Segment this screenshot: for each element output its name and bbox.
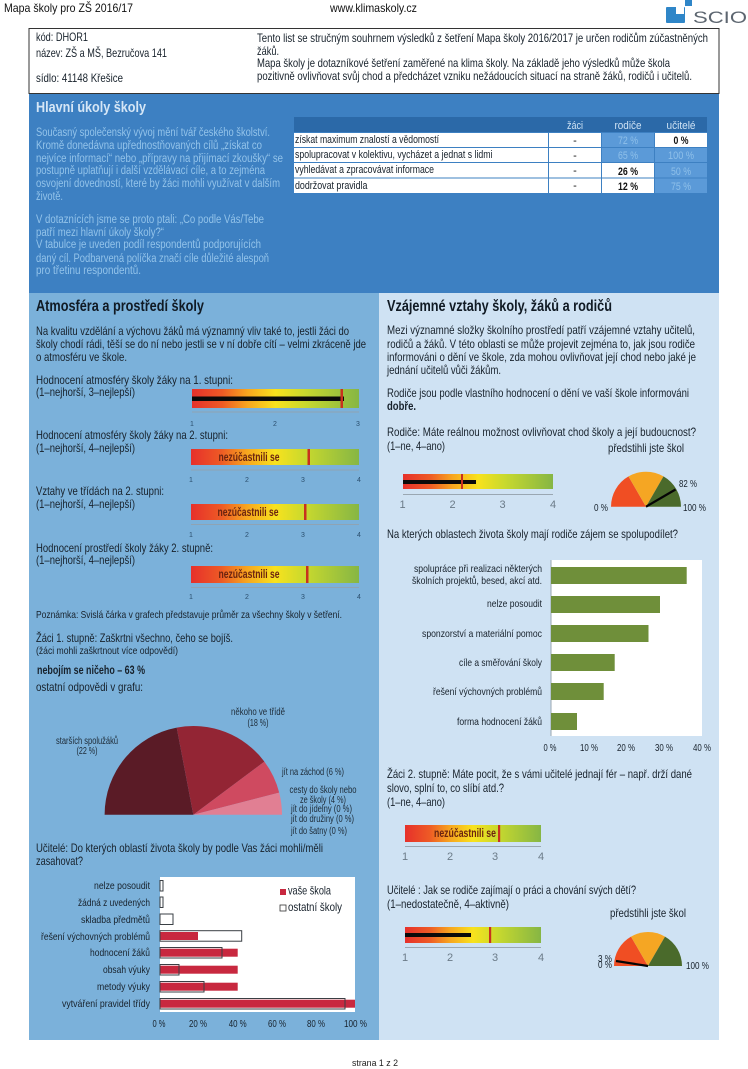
table rows: - [573,150,577,162]
page footer: strana 1 z 2 [352,1058,398,1069]
page header: www.klimaskoly.cz [329,1,417,15]
scale chart: class relations: 2 [245,532,249,539]
intro text: žáků. [257,44,279,58]
legend: vaše škola [288,884,331,898]
icon: SCIO logo: SCIO [693,8,747,27]
category labels: spolupráce při realizaci některých [414,563,542,575]
panel: relationships of school, pupils and parents [379,293,719,1040]
category labels: školních projektů, besed, akcí atd. [412,575,542,587]
green bars [551,567,687,730]
scale chart: atmosphere, 2nd grade pupils: Hodnocení atmosféry školy žáky na 2. stupni: [36,428,228,442]
scale chart: atmosphere, 2nd grade pupils: (1–nejhorší, 4–nejlepší) [36,441,135,455]
scale chart: school environment: (1–nejhorší, 4–nejlepší) [36,553,135,567]
scale chart: school environment: 3 [301,594,305,601]
scale chart: class relations: 4 [357,532,361,539]
table rows: dodržovat pravidla [295,180,368,192]
table rows: 50 % [671,166,691,178]
scale chart: teachers on parents interest: Učitelé : Jak se rodiče zajímají o práci a chování svých dětí? [387,883,636,897]
gauge: teachers percentile: předstihli jste škol [610,906,686,920]
scale chart: pupils on teacher fairness [387,766,692,863]
scale chart: school environment: 1 [189,594,193,601]
page header: Mapa školy pro ZŠ 2016/17 [4,0,133,15]
scale chart: parents influencing school: 2 [449,499,456,511]
scale chart: atmosphere, 2nd grade pupils: 4 [357,477,361,484]
red bars: your school [160,932,355,1008]
scale chart: teachers on parents interest: 1 [402,952,408,964]
table rows [294,133,707,193]
scale chart: pupils on teacher fairness: 2 [447,851,453,863]
legend: ostatní školy [288,900,342,914]
axis labels: 60 % [268,1018,286,1030]
table rows: 0 % [674,135,689,147]
pie chart: pupil fears: starších spolužáků [56,735,118,747]
axis labels: 80 % [307,1018,325,1030]
text block: pupil fears question: nebojím se ničeho – 63 % [37,663,145,677]
note on charts: Poznámka: Svislá čárka v grafech představuje průměr za všechny školy v šetření. [36,609,342,621]
text block: main tasks description: nejvíce informací“ nebo „přípravy na přijímací zkoušky“ se [36,153,283,165]
text block: pupil fears question: (žáci mohli zaškrtnout více odpovědí) [36,645,178,657]
text block: main tasks description [36,127,283,277]
pie chart: pupil fears [56,707,357,837]
scale chart: school environment: nezúčastnili se [218,569,280,581]
axis labels: 20 % [617,742,635,754]
school identification [36,30,167,85]
page header [4,0,417,15]
axis labels: 100 % [344,1018,367,1030]
outlined bars: other schools [160,880,345,1009]
category labels: žádná z uvedených [78,897,150,909]
category labels: forma hodnocení žáků [457,716,542,728]
table rows: - [573,135,577,147]
text block: main tasks description: pro třetinu respondentů. [36,265,141,277]
table rows: získat maximum znalostí a vědomostí [295,134,439,146]
gauge: parents percentile: předstihli jste škol [608,441,684,455]
gauge: parents percentile: 100 % [683,502,706,514]
table rows: - [573,180,577,192]
legend [280,884,342,914]
scale chart: parents influencing school [387,425,696,511]
category labels: nelze posoudit [487,598,542,610]
text block: atmosphere intro: školy chodí rádi, těší se do ní nebo jestli se v ní dobře cítí – velmi zkráceně jde [36,337,366,351]
school identification: kód: DHOR1 [36,30,88,44]
heading: relationships: Vzájemné vztahy školy, žáků a rodičů [387,298,612,315]
scale chart: school environment: 2 [245,594,249,601]
table rows: 12 % [618,181,638,193]
scale chart: pupils on teacher fairness: slovo, splní to, co slíbí atd.? [387,781,504,795]
gauge: parents percentile: 82 % [679,478,697,490]
text block: pupil fears question: Žáci 1. stupně: Zaškrtni všechno, čeho se bojíš. [36,630,233,645]
scale chart: atmosphere, 1st grade pupils: (1–nejhorší, 3–nejlepší) [36,385,135,399]
category labels: obsah výuky [103,964,151,976]
panel: atmosphere and school environment [29,293,379,1040]
category labels: nelze posoudit [94,880,150,892]
axis labels: 40 % [229,1018,247,1030]
pie chart: pupil fears: (18 %) [248,718,268,729]
icon: SCIO logo [666,0,747,27]
text block: main tasks description: Současný společenský vývoj mění tvář českého školství. [36,127,270,139]
question: parents areas of interest: Na kterých oblastech života školy mají rodiče zájem se spolupodílet? [387,527,678,541]
question: teachers on pupil involvement [36,841,323,868]
scale chart: atmosphere, 1st grade pupils [36,373,360,428]
table rows: spolupracovat v kolektivu, vycházet a jednat s lidmi [295,149,492,161]
text block: main tasks description: Kromě donedávna upřednostňovaných cílů „získat co [36,140,262,152]
scale chart: teachers on parents interest [387,883,636,964]
axis labels: 0 % [152,1018,166,1030]
heading: atmosphere: Atmosféra a prostředí školy [36,298,204,315]
scale chart: parents influencing school: 4 [550,499,556,511]
text block: main tasks description: postupně uplatňují i další vzdělávací cíle, a to zejména [36,165,265,177]
text block: pupil fears question: ostatní odpovědi v grafu: [36,680,143,694]
category labels [412,563,543,728]
table rows: 100 % [668,150,694,162]
table rows: - [573,165,577,177]
scale chart: class relations: 3 [301,532,305,539]
text block: pupil fears question [36,630,233,694]
text block: relationships intro: dobře. [387,399,416,413]
category labels [41,880,151,1010]
axis labels: 20 % [189,1018,207,1030]
bar chart: parents areas of interest [412,560,711,754]
pie chart: pupil fears: jít do družiny (0 %) [290,814,354,825]
table rows: 72 % [618,135,638,147]
scale chart: teachers on parents interest: 4 [538,952,544,964]
table rows: 26 % [618,166,638,178]
table: main tasks by respondent group [294,117,707,193]
pie chart: pupil fears: (22 %) [76,746,98,757]
scale chart: parents influencing school: 3 [499,499,506,511]
question: teachers on pupil involvement: Učitelé: Do kterých oblastí života školy by podle Vas žáci mohli/měli [36,841,323,855]
bar chart: teachers on pupil involvement [41,877,367,1030]
table: main tasks by respondent group: rodiče [614,120,642,132]
scale chart: pupils on teacher fairness: 4 [538,851,544,863]
panel: main school tasks [29,94,719,293]
category labels: řešení výchovných problémů [433,686,542,698]
text block: relationships intro [386,323,696,413]
scale chart: school environment [36,541,361,601]
gauge: parents percentile [594,441,706,514]
axis labels [544,742,711,754]
category labels: sponzorství a materiální pomoc [422,628,542,640]
school identification: název: ZŠ a MŠ, Bezručova 141 [36,45,167,60]
scale chart: atmosphere, 2nd grade pupils: 3 [301,477,305,484]
scale chart: pupils on teacher fairness: (1–ne, 4–ano) [387,795,445,809]
text block: main tasks description: patří mezi hlavní úkoly školy?“ [36,227,164,239]
pie chart: pupil fears: jít do šatny (0 %) [290,826,347,837]
scale chart: atmosphere, 2nd grade pupils: nezúčastnili se [218,452,280,464]
scale chart: atmosphere, 1st grade pupils: 1 [190,421,194,428]
table rows: 75 % [671,181,691,193]
axis labels: 30 % [655,742,673,754]
gauge: parents percentile: 0 % [594,502,608,514]
scale chart: class relations: Vztahy ve třídách na 2. stupni: [36,484,164,498]
scale chart: parents influencing school: (1–ne, 4–ano) [387,439,445,453]
category labels: cíle a směřování školy [459,657,543,669]
school identification: sídlo: 41148 Křešice [36,71,123,85]
intro text [257,31,708,83]
pie chart: pupil fears: cesty do školy nebo [290,785,357,796]
gauge: teachers percentile: 100 % [686,960,709,972]
pie chart: pupil fears: ze školy (4 %) [300,795,346,806]
pie chart: pupil fears: jít na záchod (6 %) [281,767,344,778]
text block: main tasks description: daný cíl. Podbarvená políčka značí cíle důležité alespoň [36,253,269,265]
category labels: skladba předmětů [81,914,150,926]
text block: atmosphere intro: Na kvalitu vzdělání a výchovu žáků má významný vliv také to, jestli žáci do [36,324,349,338]
gauge: teachers percentile [598,906,709,972]
scale chart: atmosphere, 2nd grade pupils: 2 [245,477,249,484]
text block: main tasks description: osvojení dovedností, které by žáci mohli využívat v dalším [36,178,280,190]
scale chart: teachers on parents interest: 3 [492,952,498,964]
scale chart: school environment: 4 [357,594,361,601]
scale chart: teachers on parents interest: 2 [447,952,453,964]
text block: relationships intro: jednání učitelů vůči žákům. [386,363,501,377]
scale chart: atmosphere, 1st grade pupils: 3 [356,421,360,428]
table rows: 65 % [618,150,638,162]
text block: atmosphere intro [36,324,366,364]
scale chart: atmosphere, 1st grade pupils: 2 [273,421,277,428]
pie chart: pupil fears: někoho ve třídě [231,707,285,718]
axis labels: 40 % [693,742,711,754]
text block: main tasks description: životě. [36,191,63,203]
pie chart: pupil fears: jít do jídelny (0 %) [290,804,352,815]
scale chart: class relations: (1–nejhorší, 4–nejlepší) [36,497,135,511]
scale chart: parents influencing school: 1 [399,499,406,511]
table: main tasks by respondent group: učitelé [666,120,696,132]
scale chart: pupils on teacher fairness: 1 [402,851,408,863]
gauge: teachers percentile: 0 % [598,959,612,971]
category labels: hodnocení žáků [90,947,150,959]
scale chart: atmosphere, 1st grade pupils: Hodnocení atmosféry školy žáky na 1. stupni: [36,373,233,387]
scale chart: class relations [36,484,361,539]
heading: main tasks: Hlavní úkoly školy [36,99,147,116]
scale chart: teachers on parents interest: (1–nedostatečně, 4–aktivně) [387,897,509,911]
axis labels: 10 % [580,742,598,754]
axis labels [152,1018,367,1030]
table: main tasks by respondent group: žáci [567,120,583,132]
text block: main tasks description: V tabulce je uveden podíl respondentů podporujících [36,239,261,251]
scale chart: school environment: Hodnocení prostředí školy žáky 2. stupně: [36,541,213,555]
scale chart: atmosphere, 2nd grade pupils: 1 [189,477,193,484]
text block: main tasks description: V dotaznících jsme se proto ptali: „Co podle Vás/Tebe [36,214,264,226]
category labels: vytváření pravidel třídy [62,998,151,1010]
category labels: metody výuky [97,981,151,993]
scale chart: atmosphere, 2nd grade pupils [36,428,361,484]
scale chart: class relations: nezúčastnili se [218,507,278,519]
table rows: vyhledávat a zpracovávat informace [295,164,434,176]
axis labels: 0 % [544,742,556,754]
text block: atmosphere intro: o atmosféru ve škole. [36,350,127,364]
question: teachers on pupil involvement: zasahovat? [36,854,83,868]
gauge: teachers percentile: 3 % [598,953,612,965]
scale chart: class relations: 1 [189,532,193,539]
panel: school info box [29,28,719,94]
category labels: řešení výchovných problémů [41,931,150,943]
scale chart: pupils on teacher fairness: 3 [492,851,498,863]
scale chart: pupils on teacher fairness: nezúčastnili se [434,828,496,840]
